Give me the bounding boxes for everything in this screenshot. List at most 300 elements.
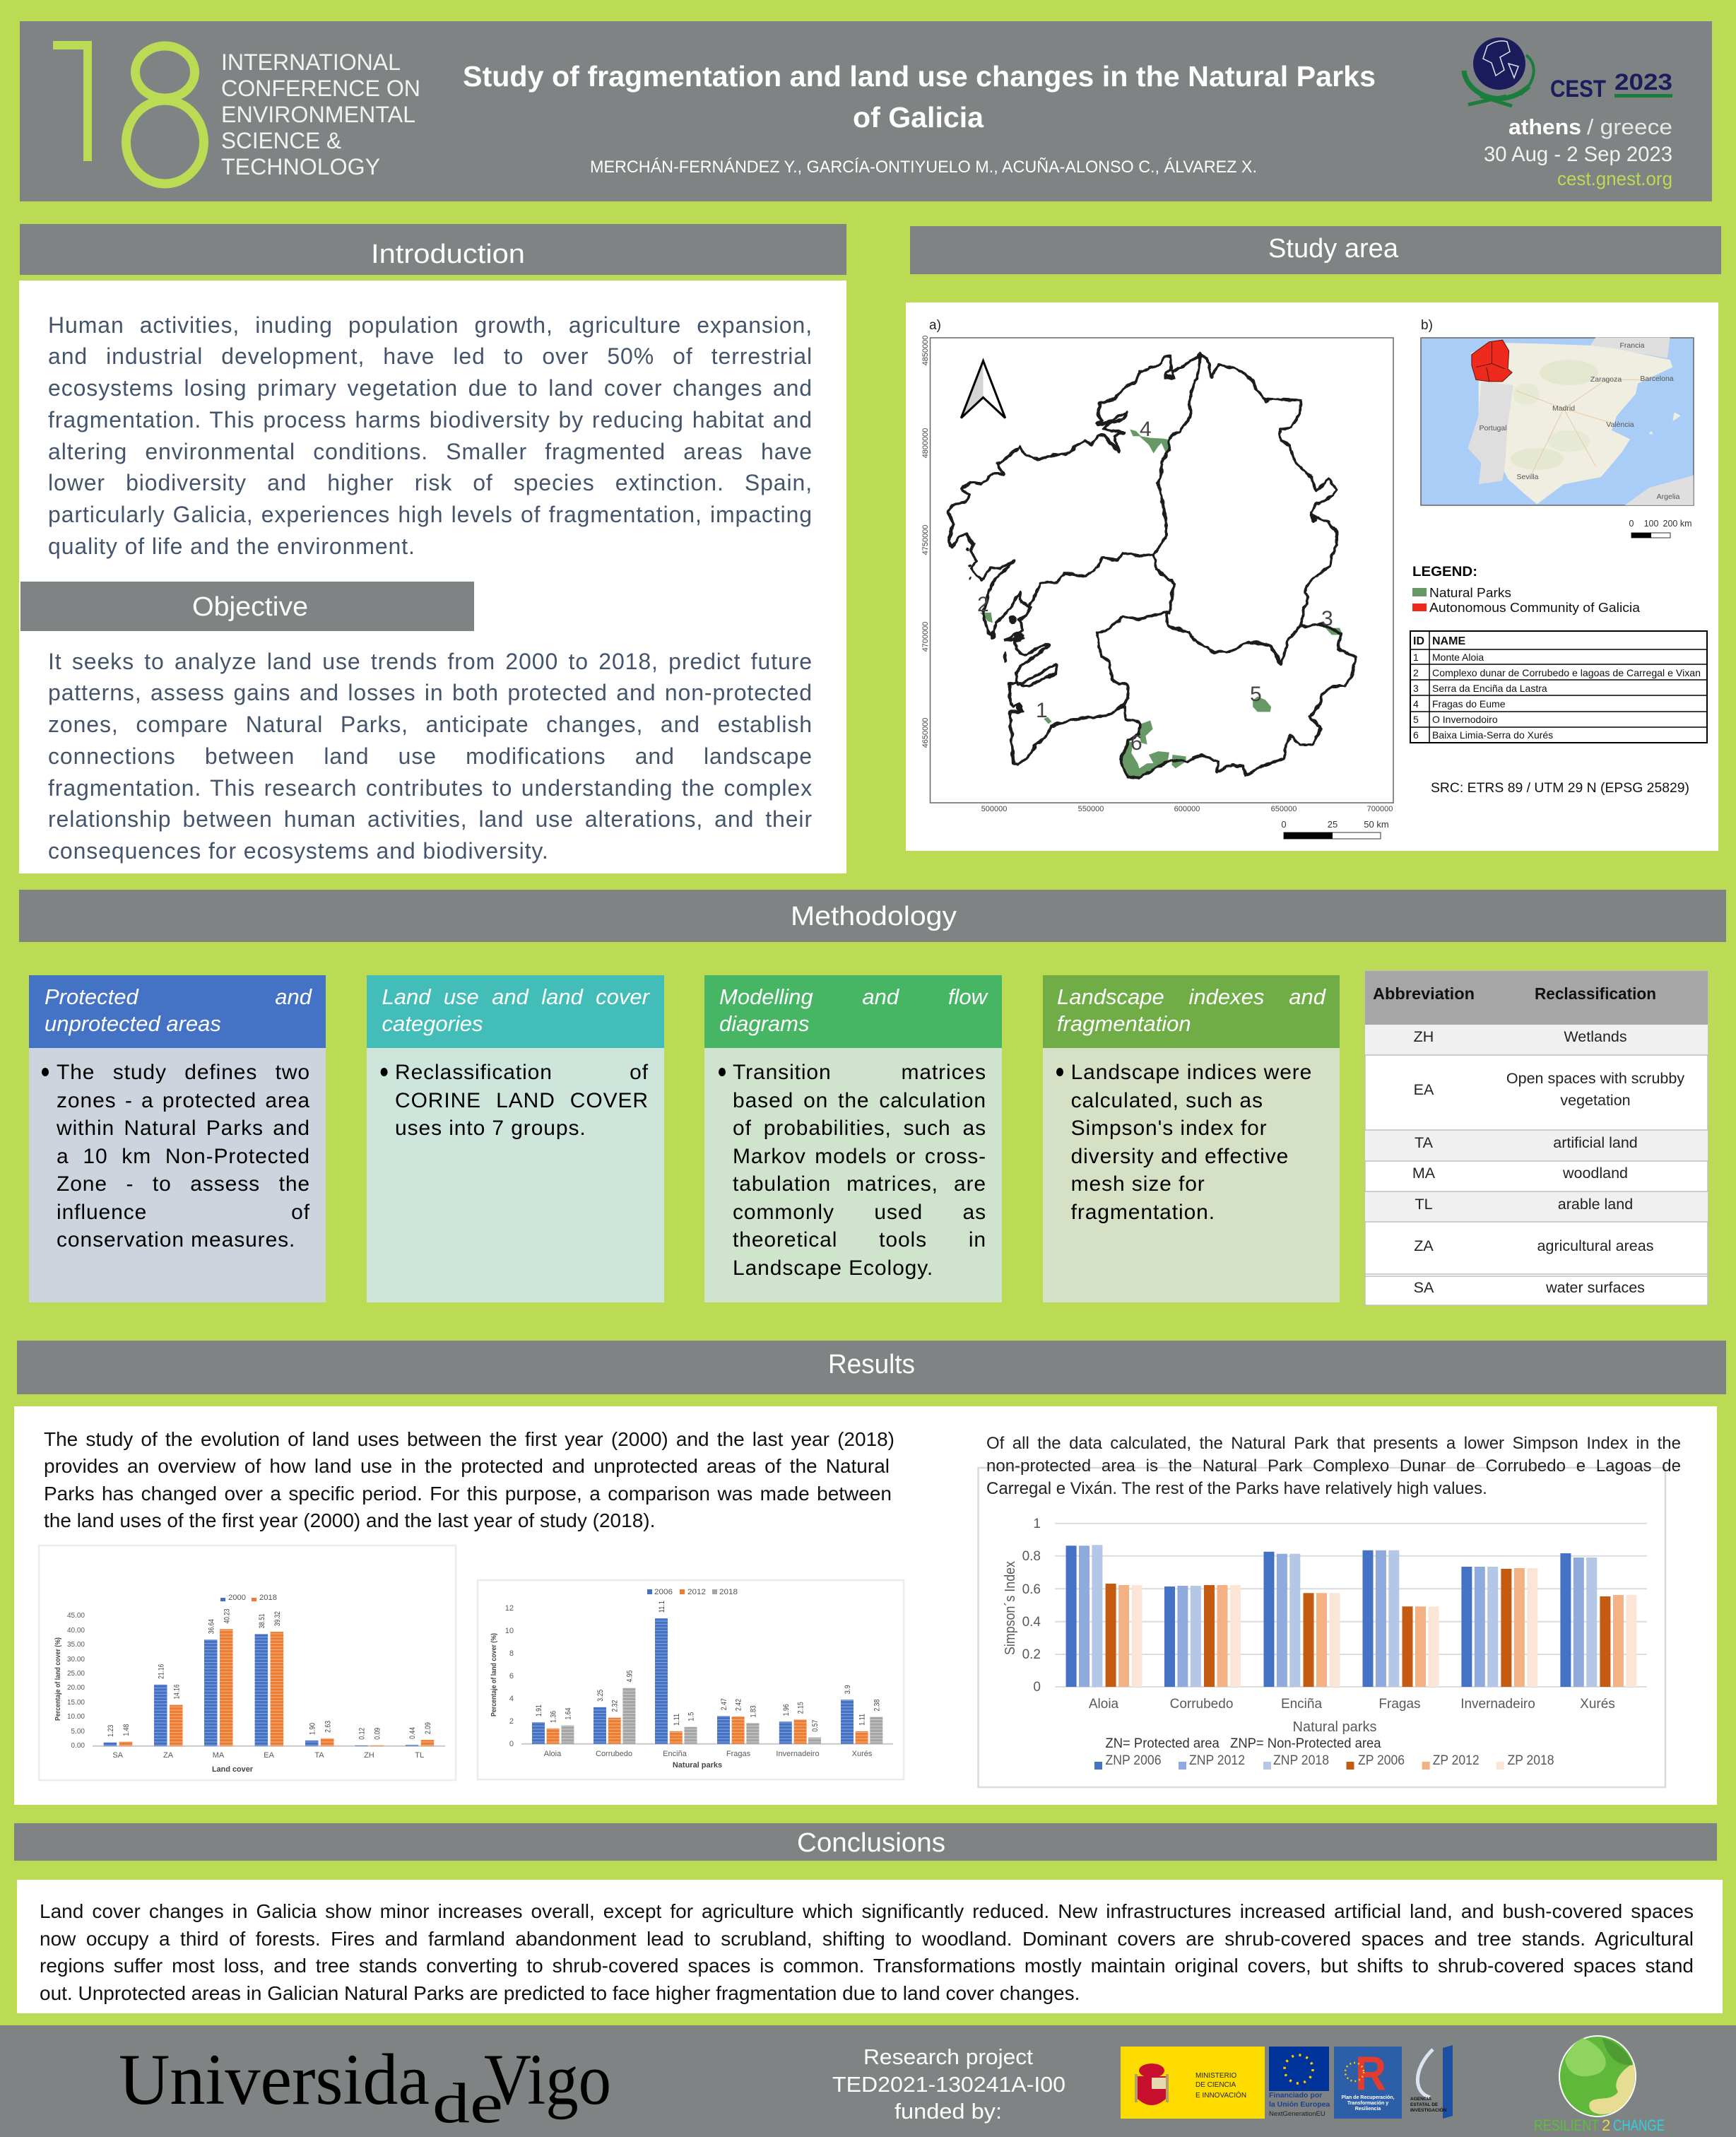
- map legend: [1412, 565, 1641, 615]
- table: land cover reclassification: water surfaces: [1545, 1279, 1645, 1296]
- table: land cover reclassification: MA: [1412, 1165, 1436, 1182]
- card heading: landscape indexes and fragmentation: fragmentation: [1057, 1011, 1191, 1036]
- conference name: INTERNATIONAL: [221, 49, 401, 75]
- chart: land cover in natural parks by year: [478, 1580, 904, 1779]
- province borders: [947, 352, 1355, 777]
- value labels: 1.90: [308, 1723, 317, 1735]
- card text: protected and unprotected areas: conservation measures.: [57, 1228, 295, 1252]
- y axis ticks: [505, 1604, 514, 1748]
- value labels: 1.23: [107, 1725, 115, 1737]
- text block: results intro: the land uses of the first year (2000) and the last year of study (2018).: [44, 1509, 655, 1531]
- card text: protected and unprotected areas: [57, 1061, 310, 1252]
- category labels: Enciña: [663, 1750, 687, 1758]
- conference place and date: 30 Aug - 2 Sep 2023: [1484, 143, 1672, 166]
- locator place names: Barcelona: [1640, 375, 1674, 383]
- text block: Simpson index note: [986, 1434, 1681, 1498]
- card text: land use and land cover categories: [395, 1061, 649, 1140]
- funding note: Research project: [863, 2044, 1033, 2069]
- y axis ticks: 45.00: [67, 1612, 85, 1620]
- card heading: land use and land cover categories: Land use and land cover: [382, 984, 649, 1009]
- text block: objective: zones, compare Natural Parks, anticipate changes, and establish: [48, 712, 813, 737]
- y axis ticks: 0.6: [1022, 1582, 1041, 1597]
- logo: recovery plan: Resiliencia: [1355, 2107, 1381, 2112]
- table: land cover reclassification: woodland: [1562, 1165, 1628, 1182]
- category labels: Xurés: [1580, 1697, 1615, 1712]
- card text: landscape indexes and fragmentation: diversity and effective: [1071, 1145, 1289, 1167]
- coordinate reference system note: SRC: ETRS 89 / UTM 29 N (EPSG 25829): [1431, 781, 1689, 796]
- card text: landscape indexes and fragmentation: [1071, 1061, 1312, 1224]
- text block: introduction: quality of life and the environment.: [48, 534, 415, 559]
- legend: [1094, 1753, 1554, 1770]
- logo: European Union: [1269, 2047, 1330, 2118]
- y axis ticks: 0.4: [1022, 1615, 1041, 1630]
- table: land cover reclassification: Reclassification: [1535, 984, 1656, 1003]
- card backgrounds: modelling: [704, 975, 1002, 1302]
- locator place names: [1479, 341, 1680, 501]
- park name table: [1410, 631, 1707, 743]
- value labels: 2.47: [720, 1698, 728, 1710]
- conference name: ENVIRONMENTAL: [221, 102, 415, 127]
- scale bar a: 0: [1281, 819, 1287, 830]
- map b: Iberian peninsula locator: [1421, 338, 1694, 505]
- park number labels: 1: [1036, 699, 1048, 722]
- legend: ZNP 2018: [1273, 1753, 1329, 1768]
- bars 2000: [104, 1634, 418, 1746]
- y axis ticks: 2: [509, 1717, 514, 1726]
- scale bar a: 25: [1328, 819, 1338, 830]
- category labels: Fragas: [726, 1750, 751, 1758]
- chart: Simpson's index: [978, 1468, 1665, 1787]
- map a: Galicia provinces: [921, 336, 1393, 839]
- logo: Ministerio de Ciencia e Innovación: MINISTERIO: [1195, 2072, 1237, 2080]
- text block: conclusions: now occupy a third of forests. Fires and farmland abandonment lead to scrubland, shifting to woodland. Dominant covers are shrub-covered spaces and tree stands. Agricultural: [40, 1928, 1694, 1949]
- text block: results intro: [44, 1428, 894, 1531]
- poster title: Study of fragmentation and land use changes in the Natural Parks: [463, 60, 1376, 93]
- card heading: modelling and flow diagrams: [719, 984, 988, 1036]
- y axis coordinates: 4850000: [921, 336, 930, 365]
- table: land cover reclassification: artificial land: [1553, 1134, 1638, 1151]
- text block: results intro: The study of the evolution of land uses between the first year (2000) and the last year (2018): [44, 1428, 894, 1450]
- table: land cover reclassification: ZA: [1414, 1237, 1434, 1254]
- value labels: 1.36: [550, 1711, 558, 1723]
- chart: Simpson's index: Simpson´s Index: [1003, 1561, 1018, 1655]
- value labels: 3.9: [844, 1685, 852, 1694]
- card text: modelling and flow diagrams: tabulation matrices, are: [733, 1172, 986, 1196]
- conference place and date: [1484, 114, 1672, 189]
- text block: objective: connections between land use modifications and landscape: [48, 743, 813, 769]
- value labels: 1.11: [858, 1714, 867, 1726]
- locator place names: Argelia: [1657, 493, 1680, 501]
- card text: modelling and flow diagrams: Transition matrices: [733, 1061, 986, 1084]
- value labels: 1.96: [782, 1704, 791, 1716]
- legend: 2006: [654, 1588, 673, 1596]
- bars ZNP 2006: [1066, 1546, 1571, 1687]
- table: land cover reclassification: TA: [1415, 1134, 1434, 1151]
- x axis coordinates: 600000: [1174, 805, 1200, 813]
- y axis ticks: 0.2: [1022, 1647, 1041, 1662]
- heading: objective: [20, 582, 474, 631]
- legend: ZNP 2012: [1189, 1753, 1245, 1768]
- bars ZP 2006: [1106, 1569, 1610, 1687]
- text block: results intro: provides an overview of how land use in the protected and unprotected areas of the Natural: [44, 1455, 890, 1477]
- conference place and date: / greece: [1587, 114, 1672, 139]
- y axis ticks: 4: [509, 1695, 514, 1703]
- text block: Simpson index note: Of all the data calculated, the Natural Park that presents a lower Simpson Index in the: [986, 1434, 1681, 1453]
- category labels: [112, 1751, 424, 1760]
- bars ZP 2012: [1118, 1568, 1624, 1687]
- text block: introduction: fragmentation. This process harms biodiversity by reducing habitat and: [48, 407, 813, 432]
- table: land cover reclassification: Wetlands: [1564, 1028, 1627, 1045]
- y axis ticks: 8: [509, 1649, 514, 1658]
- card text: modelling and flow diagrams: of probabilities, such as: [733, 1117, 986, 1140]
- logo: state research agency: AGENCIA: [1410, 2097, 1431, 2102]
- park name table: 5: [1413, 714, 1419, 725]
- park name table: Complexo dunar de Corrubedo e lagoas de Carregal e Vixan: [1432, 667, 1701, 678]
- value labels: [107, 1608, 432, 1740]
- category labels: TL: [415, 1751, 424, 1760]
- text block: results intro: Parks has changed over a specific period. For this purpose, a comparison was made between: [44, 1483, 892, 1505]
- y axis coordinates: 4800000: [921, 428, 930, 458]
- scale bar a: 50 km: [1364, 819, 1389, 830]
- panel: conclusions background: [17, 1880, 1723, 2013]
- logo: Universidade de Vigo: Vigo: [484, 2039, 611, 2120]
- authors: MERCHÁN-FERNÁNDEZ Y., GARCÍA-ONTIYUELO M., ACUÑA-ALONSO C., ÁLVAREZ X.: [590, 158, 1257, 177]
- park number labels: 5: [1250, 683, 1262, 706]
- scale bar a: [1281, 819, 1389, 839]
- park name table: O Invernodoiro: [1432, 714, 1498, 725]
- category labels: Fragas: [1378, 1697, 1421, 1712]
- text block: introduction: ecosystems losing primary vegetation due to land cover changes and: [48, 375, 813, 401]
- card heading: protected and unprotected areas: unprotected areas: [45, 1011, 221, 1036]
- y axis ticks: 6: [509, 1672, 514, 1680]
- category labels: Invernadeiro: [776, 1750, 820, 1758]
- logo: European Union: la Unión Europea: [1269, 2100, 1330, 2109]
- locator place names: València: [1606, 420, 1634, 429]
- y axis ticks: 5.00: [71, 1728, 85, 1736]
- y axis coordinates: [921, 336, 930, 748]
- card text: landscape indexes and fragmentation: Landscape indices were: [1071, 1061, 1312, 1084]
- table: land cover reclassification: EA: [1414, 1081, 1434, 1098]
- value labels: 38.51: [258, 1613, 266, 1628]
- card heading: modelling and flow diagrams: diagrams: [719, 1011, 810, 1036]
- legend: 2018: [259, 1594, 277, 1602]
- category labels: Corrubedo: [1170, 1697, 1233, 1712]
- logo: European Union: Financiado por: [1269, 2091, 1322, 2100]
- text block: Simpson index note: Carregal e Vixán. The rest of the Parks have relatively high values.: [986, 1479, 1487, 1498]
- park number labels: [977, 418, 1333, 755]
- card backgrounds: protected areas: [29, 975, 326, 1302]
- category labels: SA: [112, 1751, 124, 1760]
- table: land cover reclassification: arable land: [1558, 1196, 1633, 1213]
- bars 2018: [119, 1629, 434, 1746]
- card text: modelling and flow diagrams: based on the calculation: [733, 1088, 986, 1112]
- text block: introduction: particularly Galicia, experiences high levels of fragmentation, impacting: [48, 502, 813, 527]
- park number labels: 6: [1130, 731, 1142, 755]
- value labels: 4.95: [625, 1671, 634, 1682]
- value labels: 21.16: [157, 1664, 165, 1679]
- logo: state research agency: ESTATAL DE: [1410, 2102, 1439, 2107]
- heading: conclusions: [14, 1823, 1717, 1861]
- bars ZNP 2012: [1079, 1546, 1584, 1687]
- y axis ticks: 15.00: [67, 1699, 85, 1707]
- logo: Ministerio de Ciencia e Innovación: DE CIENCIA: [1195, 2081, 1236, 2089]
- bars 2012: [547, 1717, 868, 1744]
- park name table: Monte Aloia: [1432, 652, 1484, 663]
- scale bar b: 200 km: [1663, 519, 1691, 529]
- text block: conclusions: regions suffer most loss, and tree stands converting to shrub-covered spaces is common. Transformations mostly maintain original covers, but shifts to shrub-covered spaces stand: [40, 1955, 1694, 1977]
- table: land cover reclassification: Open spaces with scrubby: [1506, 1070, 1684, 1087]
- y axis ticks: 10: [505, 1627, 514, 1635]
- heading: objective: Objective: [192, 592, 308, 622]
- park name table: 1: [1413, 652, 1419, 663]
- y axis ticks: 0: [509, 1740, 514, 1748]
- zone abbreviations note: ZN= Protected area ZNP= Non-Protected area: [1105, 1736, 1381, 1751]
- card text: modelling and flow diagrams: theoretical tools in: [733, 1228, 986, 1252]
- category labels: Enciña: [1281, 1697, 1322, 1712]
- category labels: Aloia: [1089, 1697, 1119, 1712]
- logo: recovery plan: Transformación y: [1347, 2101, 1388, 2106]
- scale bar b: [1629, 519, 1691, 538]
- card text: land use and land cover categories: Reclassification of: [395, 1061, 649, 1084]
- category labels: Xurés: [852, 1750, 873, 1758]
- conference name: TECHNOLOGY: [221, 154, 380, 179]
- value labels: 2.42: [735, 1699, 743, 1711]
- category labels: Invernadeiro: [1460, 1697, 1535, 1712]
- map legend: Natural Parks: [1429, 586, 1511, 600]
- x axis coordinates: 500000: [981, 805, 1007, 813]
- value labels: 2.15: [797, 1702, 805, 1714]
- value labels: 14.16: [172, 1685, 181, 1699]
- logo: Resilient 2 Change: CHANGE: [1613, 2117, 1665, 2134]
- value labels: 0.09: [374, 1728, 382, 1740]
- y axis ticks: 1: [1033, 1517, 1041, 1531]
- bars 2006: [532, 1618, 854, 1744]
- table: land cover reclassification: ZH: [1414, 1028, 1434, 1045]
- category labels: [1089, 1697, 1615, 1712]
- logo: Resilient 2 Change: 2: [1602, 2117, 1610, 2134]
- legend: [647, 1588, 738, 1596]
- value labels: 36.64: [207, 1619, 215, 1634]
- table: land cover reclassification: TL: [1415, 1196, 1433, 1213]
- legend: ZP 2012: [1433, 1753, 1480, 1768]
- value labels: 2.32: [611, 1700, 620, 1712]
- park name table: Baixa Limia-Serra do Xurés: [1432, 729, 1553, 741]
- locator place names: Sevilla: [1517, 473, 1539, 481]
- value labels: 1.5: [687, 1712, 695, 1721]
- y axis coordinates: 4750000: [921, 525, 930, 555]
- park name table: Serra da Enciña da Lastra: [1432, 683, 1547, 694]
- card text: landscape indexes and fragmentation: mesh size for: [1071, 1172, 1205, 1196]
- table: land cover reclassification: [1365, 971, 1708, 1305]
- poster title: of Galicia: [853, 101, 984, 134]
- value labels: 0.44: [408, 1727, 417, 1739]
- logo: Ministerio de Ciencia e Innovación: E INNOVACIÓN: [1195, 2090, 1246, 2100]
- text block: objective: [48, 649, 813, 864]
- bars 2018: [561, 1688, 882, 1744]
- chart: land cover in natural parks by year: Percentaje of land cover (%): [490, 1633, 498, 1717]
- footer band: [0, 2025, 1736, 2137]
- text block: objective: It seeks to analyze land use trends from 2000 to 2018, predict future: [48, 649, 813, 674]
- map legend: LEGEND:: [1412, 565, 1477, 579]
- park name table: 4: [1413, 698, 1419, 710]
- card heading: landscape indexes and fragmentation: Landscape indexes and: [1057, 984, 1325, 1009]
- table: land cover reclassification: SA: [1414, 1279, 1434, 1296]
- text block: conclusions: Land cover changes in Galicia show minor increases overall, except for agriculture which significantly reduced. New infrastructures increased artificial land, and bush-covered spaces: [40, 1900, 1694, 1922]
- card text: landscape indexes and fragmentation: fragmentation.: [1071, 1200, 1215, 1224]
- heading: study area: Study area: [1268, 234, 1399, 264]
- locator place names: Portugal: [1479, 424, 1507, 432]
- x axis coordinates: 550000: [1078, 805, 1104, 813]
- conference place and date: cest.gnest.org: [1557, 168, 1672, 189]
- logo: recovery plan: [1334, 2047, 1402, 2119]
- category labels: Aloia: [544, 1750, 562, 1758]
- heading: methodology: Methodology: [791, 902, 957, 931]
- value labels: 3.25: [596, 1690, 605, 1702]
- panel: results background: [14, 1406, 1717, 1805]
- value labels: 2.09: [424, 1722, 432, 1734]
- category labels: ZA: [163, 1751, 174, 1760]
- park name table: NAME: [1432, 635, 1465, 647]
- y axis ticks: 0: [1033, 1680, 1041, 1695]
- logo: Universidade de Vigo: [119, 2039, 611, 2135]
- card text: landscape indexes and fragmentation: Simpson's index for: [1071, 1117, 1268, 1140]
- y axis ticks: 0.8: [1022, 1549, 1041, 1564]
- funding note: TED2021-130241A-I00: [832, 2072, 1065, 2097]
- chart: land cover 2000 vs 2018: [39, 1546, 456, 1780]
- x axis coordinates: [981, 805, 1393, 813]
- axis titles: Land cover: [212, 1765, 254, 1774]
- scale bar b: 100: [1644, 519, 1658, 529]
- text block: introduction: altering environmental conditions. Smaller fragmented areas have: [48, 439, 813, 464]
- heading: introduction: [20, 224, 846, 275]
- x axis coordinates: 700000: [1367, 805, 1393, 813]
- card heading: landscape indexes and fragmentation: [1057, 984, 1326, 1036]
- north arrow: [961, 361, 1005, 418]
- natural parks polygons: [980, 430, 1342, 777]
- value labels: 1.11: [673, 1714, 681, 1726]
- conference place and date: athens: [1508, 114, 1581, 139]
- value labels: 0.57: [811, 1720, 820, 1732]
- park name table: 6: [1413, 729, 1419, 741]
- card heading: land use and land cover categories: categories: [382, 1011, 483, 1036]
- locator place names: Madrid: [1552, 404, 1575, 413]
- park name table: 2: [1413, 667, 1419, 678]
- value labels: 11.1: [658, 1601, 666, 1613]
- conference number 18: [53, 41, 203, 184]
- category labels: ZH: [364, 1751, 374, 1760]
- heading: results: [17, 1341, 1726, 1394]
- category labels: [544, 1750, 873, 1758]
- logo: Resilient 2 Change: RESILIENT: [1534, 2117, 1599, 2134]
- value labels: 1.64: [564, 1707, 572, 1720]
- logo: state research agency: [1410, 2045, 1453, 2119]
- axis titles: Natural parks: [1293, 1719, 1376, 1735]
- text block: introduction: [48, 312, 813, 559]
- y axis ticks: 10.00: [67, 1713, 85, 1721]
- park name table: 3: [1413, 683, 1419, 694]
- chart: land cover 2000 vs 2018: Percentaje of land cover (%): [54, 1637, 62, 1721]
- text block: introduction: Human activities, inuding population growth, agriculture expansion,: [48, 312, 813, 338]
- value labels: 1.83: [749, 1705, 757, 1717]
- card text: land use and land cover categories: CORINE LAND COVER: [395, 1088, 649, 1112]
- card text: protected and unprotected areas: Zone - to assess the: [57, 1172, 310, 1196]
- card text: modelling and flow diagrams: Landscape Ecology.: [733, 1256, 933, 1279]
- category labels: EA: [264, 1751, 275, 1760]
- card heading: modelling and flow diagrams: Modelling and flow: [719, 984, 987, 1009]
- logo: Universidade de Vigo: Universida: [119, 2039, 430, 2120]
- card text: protected and unprotected areas: a 10 km Non-Protected: [57, 1145, 310, 1167]
- bars ZP 2018: [1132, 1568, 1636, 1687]
- CEST 2023 logo: 2023: [1614, 69, 1672, 95]
- category labels: TA: [314, 1751, 324, 1760]
- table: land cover reclassification: agricultural areas: [1537, 1237, 1653, 1254]
- category labels: Corrubedo: [596, 1750, 632, 1758]
- y axis ticks: 0.00: [71, 1742, 85, 1750]
- text block: objective: consequences for ecosystems and biodiversity.: [48, 838, 549, 864]
- y axis ticks: [1022, 1517, 1041, 1695]
- card backgrounds: landscape indexes: [1043, 975, 1340, 1302]
- conference name: CONFERENCE ON: [221, 76, 420, 101]
- text block: Simpson index note: non-protected area is the Natural Park Complexo Dunar de Corrubedo e Lagoas de: [986, 1456, 1681, 1476]
- park number labels: 3: [1321, 607, 1333, 630]
- axis titles: Natural parks: [673, 1761, 722, 1770]
- panel: study area maps: [906, 302, 1718, 851]
- card text: modelling and flow diagrams: Markov models or cross-: [733, 1145, 986, 1167]
- map a label: a): [929, 318, 941, 333]
- table: land cover reclassification: Abbreviation: [1373, 984, 1475, 1003]
- conference name: SCIENCE &: [221, 128, 341, 153]
- legend: 2012: [687, 1588, 706, 1596]
- heading: conclusions: Conclusions: [797, 1828, 945, 1858]
- value labels: [535, 1601, 881, 1732]
- logo: European Union: NextGenerationEU: [1269, 2110, 1325, 2118]
- card backgrounds: land use categories: [367, 975, 664, 1302]
- heading: study area: [910, 226, 1721, 274]
- value labels: 1.48: [122, 1724, 131, 1736]
- logo: recovery plan: Plan de Recuperación,: [1341, 2095, 1395, 2100]
- park number labels: 2: [977, 593, 989, 616]
- text block: objective: fragmentation. This research contributes to understanding the complex: [48, 775, 813, 801]
- value labels: 40.23: [223, 1608, 231, 1623]
- scale bar b: 0: [1629, 519, 1634, 529]
- card text: protected and unprotected areas: influence of: [57, 1200, 310, 1224]
- text block: introduction: and industrial development, have led to over 50% of terrestrial: [48, 343, 813, 369]
- conference name: [221, 49, 420, 179]
- map legend: Autonomous Community of Galicia: [1429, 601, 1641, 615]
- card heading: land use and land cover categories: [382, 984, 650, 1036]
- card text: modelling and flow diagrams: commonly used as: [733, 1200, 986, 1224]
- y axis ticks: 20.00: [67, 1684, 85, 1692]
- y axis ticks: 35.00: [67, 1641, 85, 1649]
- map b label: b): [1421, 318, 1433, 333]
- park name table: ID: [1413, 635, 1424, 647]
- locator place names: Zaragoza: [1590, 375, 1622, 384]
- y axis ticks: [67, 1612, 85, 1750]
- legend: ZP 2006: [1358, 1753, 1405, 1768]
- logo: Resilient 2 Change: [1534, 2036, 1665, 2134]
- category labels: MA: [213, 1751, 225, 1760]
- value labels: 0.12: [358, 1728, 367, 1740]
- text block: introduction: lower biodiversity and higher risk of species extinction. Spain,: [48, 470, 813, 495]
- funding note: funded by:: [894, 2099, 1002, 2124]
- card text: modelling and flow diagrams: [733, 1061, 986, 1279]
- legend: ZP 2018: [1508, 1753, 1554, 1768]
- legend: 2000: [228, 1594, 246, 1602]
- y axis coordinates: 4700000: [921, 622, 930, 652]
- poster title: [463, 60, 1376, 134]
- bars ZNP 2018: [1092, 1545, 1597, 1687]
- text block: conclusions: out. Unprotected areas in Galician Natural Parks are predicted to face higher fragmentation due to land cover changes.: [40, 1982, 1080, 2004]
